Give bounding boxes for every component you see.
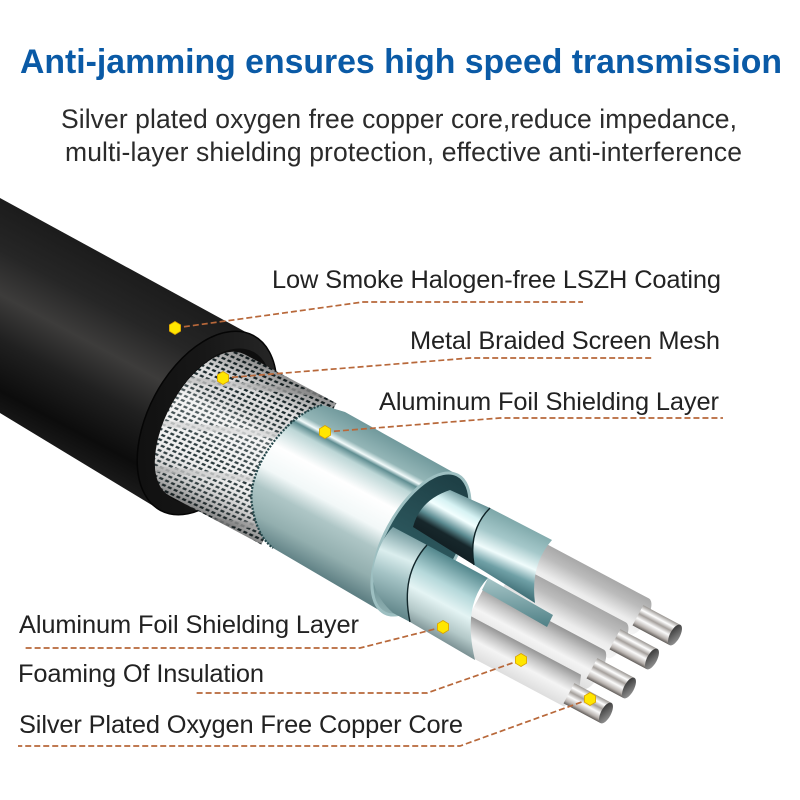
label: inner foil: Aluminum Foil Shielding Layer	[19, 611, 360, 639]
insulated core upper 1	[520, 540, 689, 655]
lower inner foil	[373, 527, 488, 660]
aluminum foil shell	[251, 405, 490, 630]
label: foaming insulation	[18, 654, 527, 693]
label: outer foil	[319, 388, 723, 438]
metal braided mesh	[133, 335, 336, 544]
subtitle: multi-layer shielding protection, effective anti-interference	[65, 137, 742, 167]
label: foaming insulation: Foaming Of Insulation	[18, 660, 264, 688]
label: braided mesh	[217, 327, 720, 384]
label: copper core: Silver Plated Oxygen Free Copper Core	[19, 711, 463, 739]
label: copper core	[18, 692, 596, 746]
cable illustration	[0, 198, 689, 728]
insulated core upper 2	[497, 564, 666, 679]
label: inner foil	[19, 611, 449, 648]
title: Anti-jamming ensures high speed transmission	[20, 43, 782, 81]
label: outer foil: Aluminum Foil Shielding Layer	[379, 388, 720, 416]
insulated core lower 1	[464, 586, 644, 710]
label: LSZH coating	[169, 266, 721, 334]
label: braided mesh: Metal Braided Screen Mesh	[410, 327, 720, 355]
subtitle	[61, 104, 742, 167]
subtitle: Silver plated oxygen free copper core,reduce impedance,	[61, 104, 737, 134]
upper inner foil	[413, 490, 552, 603]
foil strip	[482, 578, 553, 627]
outer jacket	[0, 198, 306, 538]
label: LSZH coating: Low Smoke Halogen-free LSZH Coating	[272, 266, 721, 294]
insulated core lower 2	[445, 611, 621, 728]
